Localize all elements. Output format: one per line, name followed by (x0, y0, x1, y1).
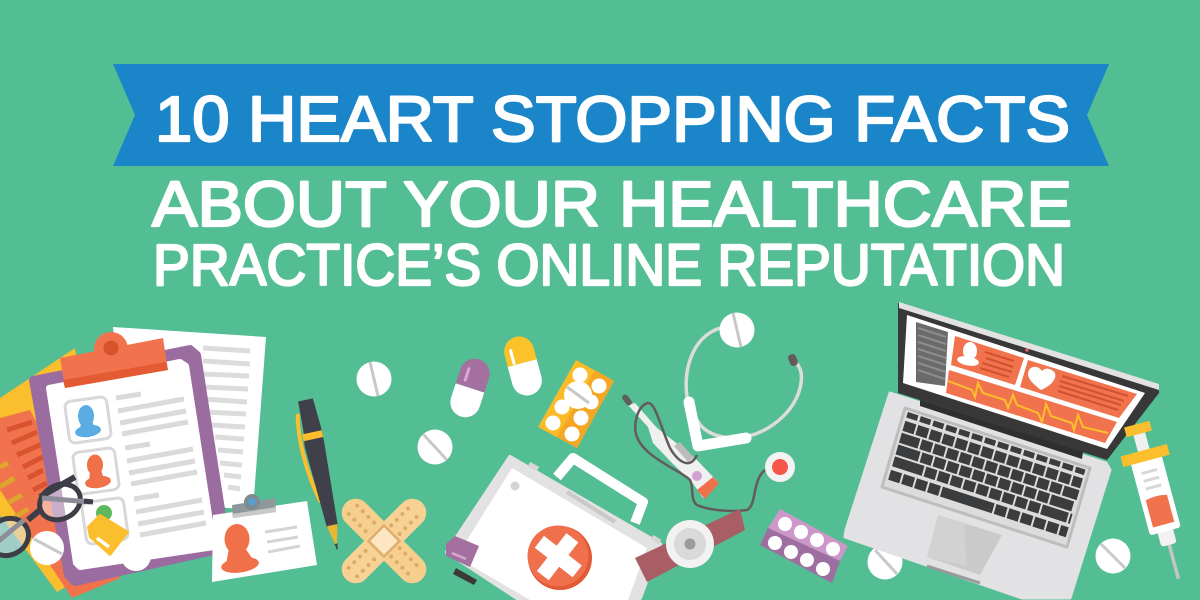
icon: glasses (0, 477, 93, 562)
profile row 3 (81, 495, 206, 545)
white yoke (689, 402, 746, 446)
profile row 1 (64, 394, 188, 444)
icon: purple capsule (446, 355, 494, 421)
clipboard clip (60, 332, 168, 388)
webcam (1025, 348, 1029, 352)
purple clipboard board (33, 349, 227, 582)
kit body (447, 457, 660, 598)
trackpad (927, 515, 1002, 575)
purple kit corner (446, 536, 479, 567)
icon: purple blister pack (760, 509, 848, 583)
subtitle line 3: PRACTICE’S ONLINE REPUTATION (153, 233, 1065, 298)
clip notch (121, 541, 151, 571)
screen sidebar (916, 322, 948, 386)
icon: stethoscope (686, 312, 801, 446)
icon: ID badge (212, 494, 317, 582)
icon: syringe (1114, 418, 1200, 585)
icon: pill on glasses (30, 531, 64, 565)
icon: stethoscope chest piece (635, 509, 745, 582)
red cross badge (524, 523, 592, 591)
kit handle (557, 458, 643, 523)
icon: laptop (845, 302, 1159, 598)
screen patient panel (951, 336, 1024, 385)
white sheet (49, 362, 214, 567)
icon: pen (292, 398, 347, 552)
screen heart-rate panel (946, 370, 1117, 443)
subtitle line 2: ABOUT YOUR HEALTHCARE (152, 168, 1072, 240)
icon: red button (765, 452, 795, 482)
yellow back paper (0, 348, 110, 592)
badge clip (232, 494, 276, 518)
laptop base (845, 393, 1110, 598)
white back sheet (113, 327, 266, 510)
earpiece pill (720, 312, 754, 348)
icon: yellow capsule (501, 333, 545, 399)
laptop notch (927, 566, 980, 583)
hinge (920, 400, 1083, 459)
badge portrait (220, 524, 260, 575)
icon: first aid kit (446, 457, 660, 600)
icon: round pill under laptop (868, 544, 902, 580)
icon: yellow tag (88, 515, 128, 555)
keyboard (882, 408, 1090, 547)
icon: round pill lower right (1096, 538, 1130, 574)
orange back paper (0, 410, 120, 598)
screen heart panel (1020, 360, 1137, 418)
icon: yellow blister pack (538, 360, 614, 448)
icon: clipboard and papers (0, 327, 266, 598)
title line 1: 10 HEART STOPPING FACTS (155, 83, 1070, 155)
laptop screen display (903, 315, 1145, 449)
icon: bandage (336, 493, 432, 589)
kit latch (453, 568, 477, 585)
laptop screen frame (898, 303, 1159, 460)
title banner (113, 64, 1109, 166)
icon: round pill 2 (418, 430, 452, 464)
icon: round pill 1 (356, 362, 392, 396)
tubing (686, 328, 720, 402)
profile row 2 (72, 444, 197, 495)
icon: thermometer with wire (621, 393, 765, 511)
